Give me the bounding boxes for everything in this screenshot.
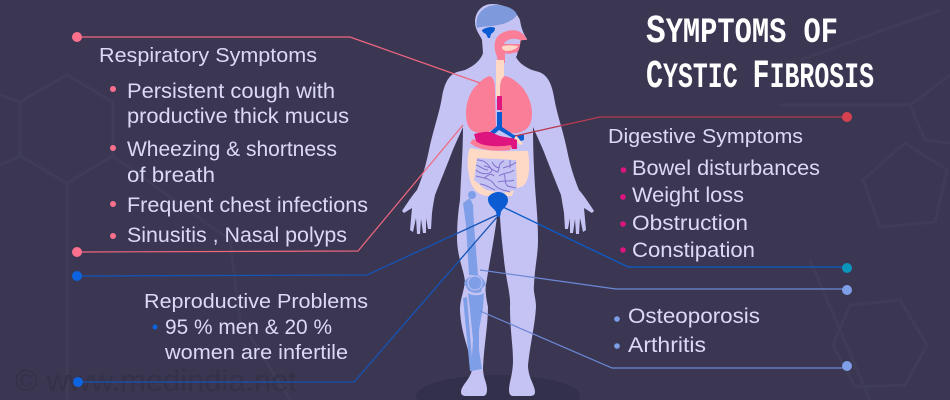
human body xyxy=(402,4,594,396)
panel: bone symptoms: Arthritis xyxy=(628,334,706,357)
lungs xyxy=(466,76,532,133)
leg bones xyxy=(463,191,486,371)
panel: respiratory symptoms: Persistent cough with xyxy=(127,80,335,103)
panel: respiratory symptoms: Respiratory Symptoms xyxy=(99,45,317,67)
brain stem xyxy=(482,27,495,38)
panel: respiratory symptoms: Sinusitis , Nasal polyps xyxy=(127,224,347,247)
panel: digestive symptoms: Digestive Symptoms xyxy=(608,126,803,148)
connector: reproductive top xyxy=(72,215,497,281)
liver xyxy=(470,139,514,151)
small intestine xyxy=(474,158,517,193)
brain xyxy=(476,5,517,28)
panel: digestive symptoms: Bowel disturbances xyxy=(632,157,820,180)
panel: reproductive problems: Reproductive Problems xyxy=(144,291,368,313)
title: SYMPTOMS OF xyxy=(646,10,838,55)
connector: respiratory top xyxy=(72,32,480,83)
panel: reproductive problems xyxy=(144,291,368,364)
bladder xyxy=(488,192,508,217)
panel: reproductive problems: women are infertile xyxy=(164,342,348,364)
panel: digestive symptoms: Weight loss xyxy=(632,184,744,207)
watermark: © www.medindia.net xyxy=(15,363,297,398)
large intestine xyxy=(468,148,529,196)
connector: bones bottom xyxy=(480,311,852,371)
title: CYSTIC FIBROSIS xyxy=(646,55,874,100)
panel: bone symptoms xyxy=(614,305,760,357)
panel: digestive symptoms xyxy=(608,126,820,262)
ground shadow xyxy=(416,375,580,400)
connector: bones top xyxy=(480,270,852,295)
body silhouette xyxy=(402,4,594,396)
panel: respiratory symptoms: Wheezing & shortness xyxy=(127,138,337,161)
connector: reproductive bottom xyxy=(73,216,498,387)
panel: respiratory symptoms: Frequent chest infections xyxy=(127,194,368,217)
nasal cavity xyxy=(504,39,520,44)
connector: digestive top xyxy=(515,112,852,136)
connector: digestive bottom xyxy=(503,207,852,273)
panel: digestive symptoms: Constipation xyxy=(632,239,755,262)
title xyxy=(646,10,874,100)
panel: respiratory symptoms: of breath xyxy=(127,164,215,187)
panel: reproductive problems: 95 % men & 20 % xyxy=(165,316,332,339)
nasal and throat passage xyxy=(495,30,527,63)
knee cap xyxy=(468,276,482,290)
connector: respiratory bottom xyxy=(72,125,463,257)
stomach xyxy=(474,132,517,149)
panel: respiratory symptoms xyxy=(99,45,368,247)
mouth xyxy=(502,45,518,51)
panel: respiratory symptoms: productive thick mucus xyxy=(127,105,349,128)
windpipe xyxy=(496,60,504,98)
heart vessels xyxy=(489,96,524,145)
panel: bone symptoms: Osteoporosis xyxy=(628,305,760,328)
panel: digestive symptoms: Obstruction xyxy=(632,212,748,235)
